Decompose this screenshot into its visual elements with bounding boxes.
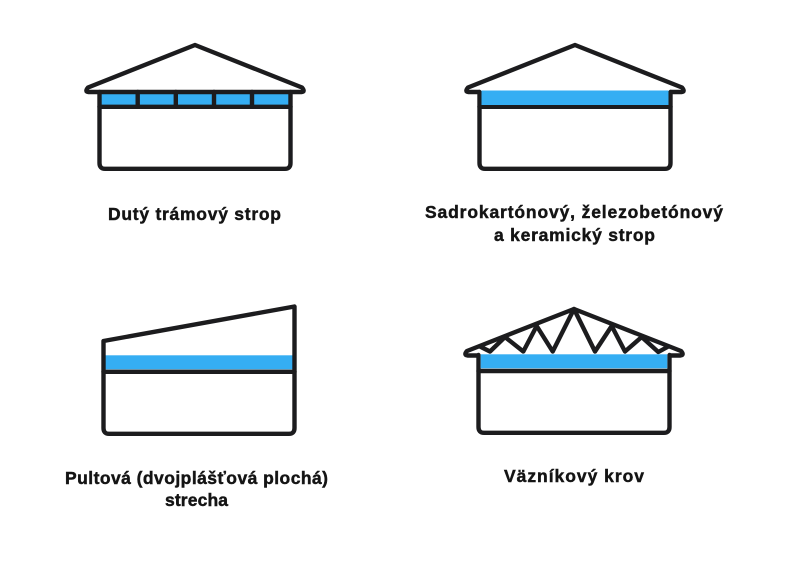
icon: house outline with sloped roof	[104, 306, 294, 434]
icon: house outline with truss roof	[465, 309, 683, 433]
heading: truss roof: Väzníkový krov	[504, 466, 644, 486]
insulation layer: blue cells	[100, 92, 290, 106]
icon: house outline with gable roof and beams	[86, 45, 304, 169]
panel: plasterboard ceiling	[466, 45, 684, 169]
heading: plasterboard ceiling: a keramický strop	[494, 225, 655, 245]
panel: mono-pitch roof	[104, 306, 294, 434]
panel: hollow beam ceiling	[86, 45, 304, 169]
heading: plasterboard ceiling: Sadrokartónový, železobetónový	[425, 202, 723, 222]
panel: truss roof	[465, 309, 683, 433]
insulation layer: blue band	[104, 355, 294, 369]
heading: mono-pitch roof: Pultová (dvojplášťová plochá)	[65, 468, 328, 488]
heading: hollow beam ceiling: Dutý trámový strop	[108, 204, 281, 224]
insulation layer: blue band	[482, 90, 668, 105]
icon: house outline with gable roof	[466, 45, 684, 169]
heading: mono-pitch roof: strecha	[165, 490, 228, 510]
insulation layer: blue band	[481, 354, 667, 368]
